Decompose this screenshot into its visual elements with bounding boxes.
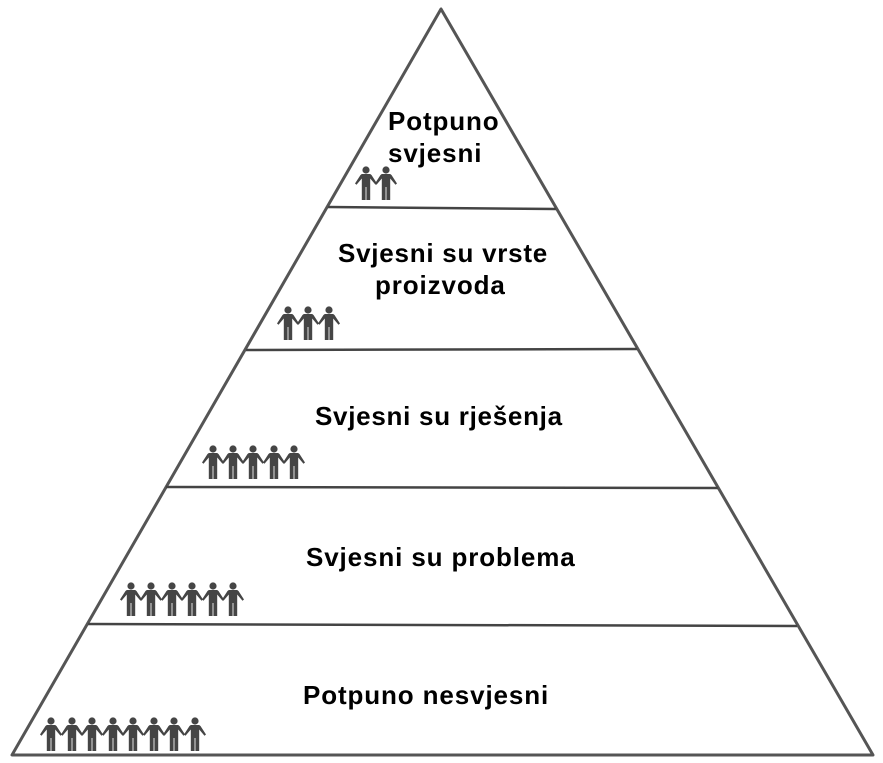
- tier 1 label: [388, 106, 500, 168]
- tier 4 label: Svjesni su problema: [306, 542, 576, 572]
- tier 1 label: svjesni: [388, 138, 482, 168]
- tier 2 people icons: [277, 306, 340, 340]
- tier divider 3: [166, 487, 718, 488]
- tier 2 label: proizvoda: [375, 270, 506, 300]
- tier 1 label: Potpuno: [388, 106, 500, 136]
- tier 3 people icons: [202, 445, 305, 479]
- tier 3 label: Svjesni su rješenja: [315, 401, 563, 431]
- tier 1 people icons: [355, 166, 397, 200]
- tier divider 2: [246, 349, 637, 350]
- tier 5 label: Potpuno nesvjesni: [303, 680, 549, 710]
- tier 2 label: [338, 238, 548, 300]
- tier divider 4: [88, 624, 797, 626]
- tier 2 label: Svjesni su vrste: [338, 238, 548, 268]
- tier 4 people icons: [120, 582, 244, 616]
- tier 5 people icons: [40, 717, 206, 751]
- tier divider 1: [328, 207, 556, 209]
